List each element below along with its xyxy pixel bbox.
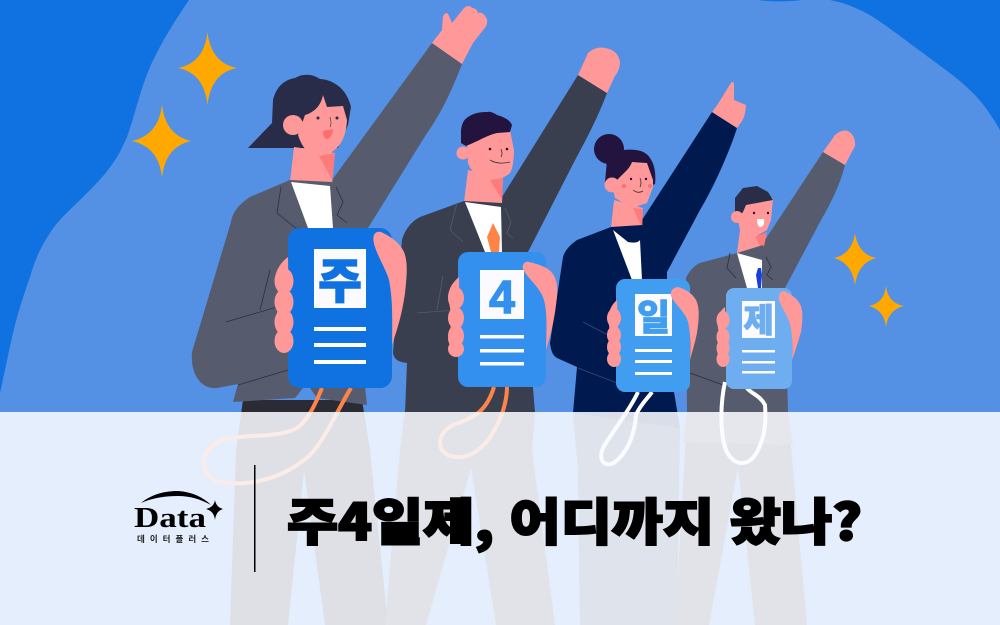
card 4: 제 bbox=[716, 288, 802, 389]
card 1 lanyard bbox=[203, 388, 351, 483]
icon: hand holding card 4 bbox=[716, 291, 802, 367]
card 3: 일 bbox=[607, 279, 699, 392]
card 3 lanyard bbox=[601, 392, 652, 464]
icon: hand holding card 3 bbox=[607, 287, 699, 367]
logo: Data 데이터플러스 bbox=[134, 491, 223, 545]
figure: person 1, woman in grey suit bbox=[192, 6, 487, 625]
logo: Data 데이터플러스: 데이터플러스 bbox=[137, 533, 209, 545]
icon: sparkle stars bbox=[132, 32, 904, 327]
bottom translucent panel bbox=[0, 412, 1000, 625]
card 2: 4 bbox=[448, 252, 557, 387]
card 3: 일: 일 bbox=[637, 289, 670, 341]
figure: person 3, woman in navy suit bbox=[550, 82, 746, 625]
title: 주4일제, 어디까지 왔나? bbox=[287, 483, 862, 555]
icon: blue necktie bbox=[756, 268, 762, 288]
divider bbox=[254, 465, 256, 572]
figure: person 4, man in grey suit bbox=[675, 130, 855, 625]
card 1: 주 bbox=[274, 228, 407, 388]
figure: person 2, man in dark suit bbox=[385, 48, 620, 625]
icon: hand holding card 1 bbox=[274, 232, 407, 353]
card 4 lanyard bbox=[721, 382, 765, 463]
icon: hand holding card 2 bbox=[448, 262, 557, 357]
card 4: 제: 제 bbox=[743, 294, 774, 342]
card 2: 4: 4 bbox=[489, 271, 515, 323]
logo: Data 데이터플러스: Data bbox=[134, 502, 207, 534]
icon: orange necktie bbox=[487, 223, 500, 252]
card 2 lanyard bbox=[440, 387, 507, 457]
card 1: 주: 주 bbox=[318, 243, 362, 312]
